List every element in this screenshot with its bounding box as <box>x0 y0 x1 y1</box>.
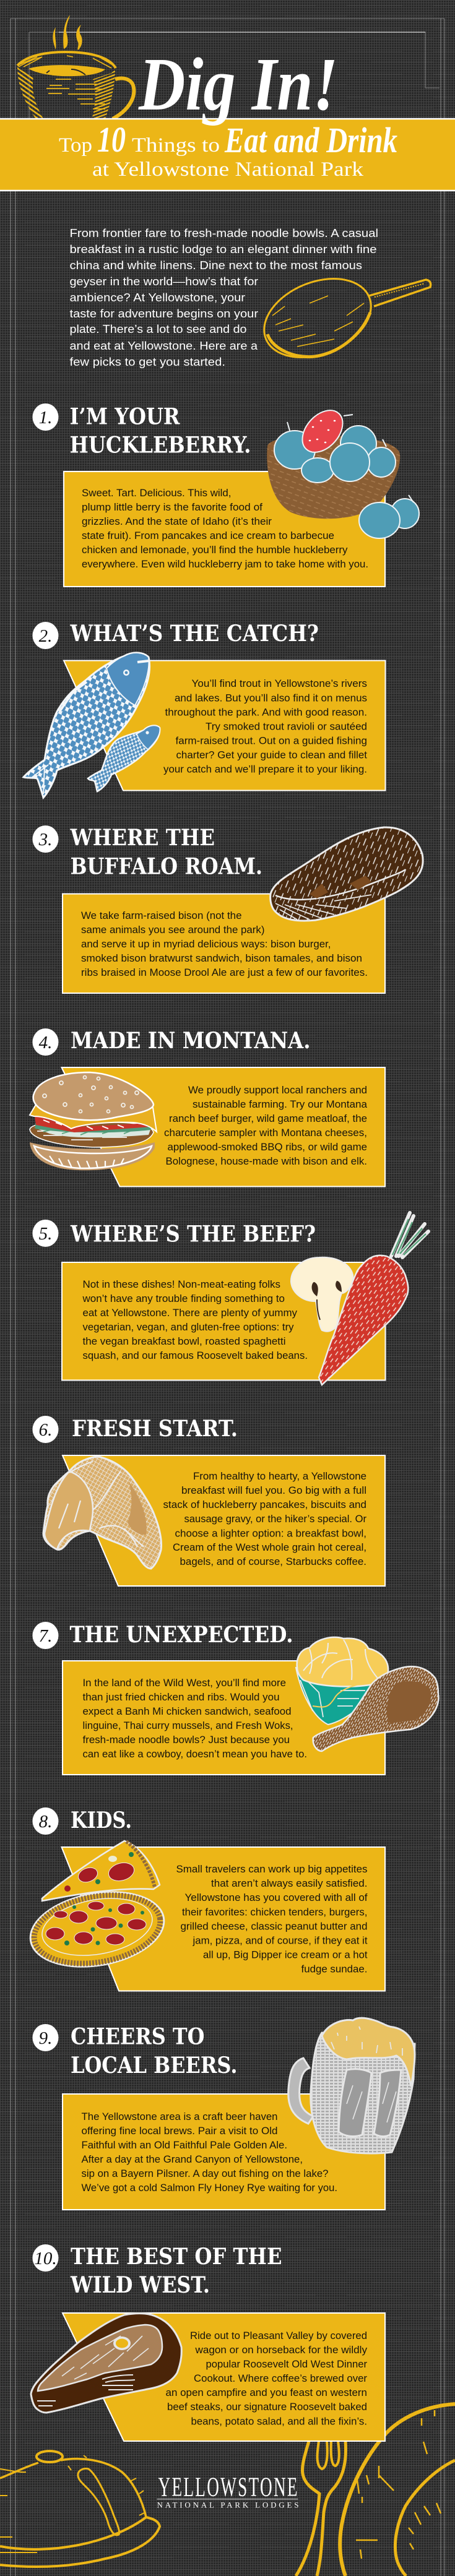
badge 6: 6. <box>39 1420 52 1440</box>
text panel: breakfast will fuel you. Go big with a full <box>181 1485 366 1496</box>
badge 10: 10. <box>34 2249 57 2268</box>
text panel: Try smoked trout ravioli or sautéed <box>206 722 367 733</box>
icon: beer mug <box>288 2018 415 2153</box>
text panel: bagels, and of course, Starbucks coffee. <box>180 1556 366 1567</box>
icon: croissant <box>43 1457 162 1569</box>
carrot leaves <box>391 1213 428 1257</box>
badge 2 <box>32 622 58 649</box>
text panel: all up, Big Dipper ice cream or a hot <box>203 1949 368 1960</box>
badge 1: 1. <box>39 408 52 428</box>
text panel: your catch and we’ll prepare it to your liking. <box>163 764 367 775</box>
icon: bison steak <box>271 827 423 921</box>
text panel <box>63 1661 385 1775</box>
heading: THE BEST OF THE <box>71 2244 282 2270</box>
heading <box>71 2023 238 2078</box>
heading: THE UNEXPECTED. <box>69 1622 293 1648</box>
text panel: popular Roosevelt Old West Dinner <box>206 2359 368 2370</box>
slice <box>42 1841 160 1901</box>
icon: chicken drumstick <box>313 1666 438 1751</box>
intro text: few picks to get you started. <box>69 355 225 368</box>
text panel: We’ve got a cold Salmon Fly Honey Rye waiting for you. <box>82 2182 337 2194</box>
tomato <box>35 1116 151 1132</box>
text panel: We take farm-raised bison (not the <box>81 910 241 921</box>
heading: I’M YOUR <box>69 403 180 429</box>
heading: HUCKLEBERRY. <box>69 432 251 458</box>
badge 3: 3. <box>38 830 52 850</box>
text panel: applewood-smoked BBQ ribs, or wild game <box>167 1142 367 1153</box>
section 5: where's the beef <box>32 1213 428 1385</box>
intro text <box>69 226 378 368</box>
logo: Yellowstone National Park Lodges: YELLOWSTONE <box>158 2471 298 2502</box>
text panel: throughout the park. And with good reason. <box>165 707 367 718</box>
intro text: geyser in the world—how’s that for <box>69 275 258 288</box>
intro text: china and white linens. Dine next to the most famous <box>69 259 362 272</box>
intro text: and eat at Yellowstone. Here are a <box>69 339 258 352</box>
bottom bun <box>30 1142 155 1170</box>
section 4: made in montana <box>30 1028 385 1187</box>
text panel: jam, pizza, and of course, if they eat it <box>192 1936 368 1947</box>
text panel: sustainable farming. Try our Montana <box>193 1099 368 1110</box>
icon: serving cloche <box>0 2451 160 2567</box>
text panel: You’ll find trout in Yellowstone’s rivers <box>192 678 367 689</box>
section 9: cheers to local beers <box>32 2018 415 2210</box>
badge 5: 5. <box>39 1224 52 1244</box>
large fish <box>24 653 150 798</box>
heading: CHEERS TO <box>71 2023 204 2049</box>
text panel: expect a Banh Mi chicken sandwich, seafood <box>83 1706 291 1717</box>
text panel: ranch beef burger, wild game meatloaf, the <box>169 1113 367 1124</box>
intro text: breakfast in a rustic lodge to an elegant dinner with fine <box>69 243 376 256</box>
text panel: Sweet. Tart. Delicious. This wild, <box>82 488 232 499</box>
text panel: In the land of the Wild West, you’ll find more <box>83 1678 286 1689</box>
text panel: From healthy to hearty, a Yellowstone <box>193 1471 366 1482</box>
badge 8 <box>32 1807 58 1835</box>
icon: basket of berries <box>267 403 419 538</box>
footer illustrations <box>0 2404 455 2576</box>
text panel: that aren’t always easily satisfied. <box>211 1878 368 1889</box>
text panel: can eat like a cowboy, doesn’t mean you have to. <box>83 1749 307 1760</box>
title: Dig In!: Dig In! <box>138 43 338 126</box>
text panel: same animals you see around the park) <box>81 924 265 936</box>
cheese <box>30 1103 157 1132</box>
subtitle <box>59 119 397 181</box>
intro text: ambience? At Yellowstone, your <box>69 291 245 304</box>
text panel: and lakes. But you’ll also find it on menus <box>175 693 367 704</box>
text panel: grilled cheese, classic peanut butter and <box>181 1921 368 1932</box>
text panel: smoked bison bratwurst sandwich, bison tamales, and bison <box>81 953 362 964</box>
heading: FRESH START. <box>72 1416 238 1442</box>
heading: BUFFALO ROAM. <box>71 854 262 880</box>
text panel <box>63 1455 385 1586</box>
text panel: Small travelers can work up big appetites <box>176 1864 368 1875</box>
section 1: huckleberry <box>32 403 419 587</box>
intro text: From frontier fare to fresh-made noodle bowls. A casual <box>69 226 378 239</box>
icon: pizza <box>25 1841 170 1976</box>
text panel: sip on a Bayern Pilsner. A day out fishing on the lake? <box>82 2168 328 2179</box>
text panel: charter? Get your guide to clean and fillet <box>176 750 367 761</box>
badge 9 <box>32 2024 58 2051</box>
badge 3 <box>32 825 58 853</box>
text panel: everywhere. Even wild huckleberry jam to take home with you. <box>82 559 368 570</box>
text panel: their favorites: chicken tenders, burgers, <box>182 1907 368 1918</box>
icon: frying pan <box>253 264 431 372</box>
text panel: eat at Yellowstone. There are plenty of yummy <box>83 1307 298 1319</box>
text panel <box>62 1847 385 1991</box>
subtitle: Eat and Drink <box>224 120 397 160</box>
text panel: After a day at the Grand Canyon of Yellowstone, <box>82 2154 303 2165</box>
badge 5 <box>32 1220 58 1247</box>
text panel <box>64 661 385 791</box>
icon: t-bone steak <box>31 2314 181 2413</box>
heading: LOCAL BEERS. <box>71 2053 238 2078</box>
badge 6 <box>32 1416 58 1443</box>
text panel: choose a lighter option: a breakfast bowl, <box>175 1528 366 1540</box>
text panel: beans, potato salad, and all the fixin’s. <box>191 2416 367 2427</box>
text panel <box>63 894 385 993</box>
text panel: fudge sundae. <box>301 1964 368 1975</box>
steam <box>53 15 82 50</box>
badge 10 <box>32 2244 58 2272</box>
text panel: The Yellowstone area is a craft beer haven <box>82 2111 277 2122</box>
intro text: plate. There’s a lot to see and do <box>69 322 246 335</box>
text panel: Faithful with an Old Faithful Pale Golden Ale. <box>82 2140 287 2151</box>
text panel: Yellowstone has you covered with all of <box>184 1892 368 1903</box>
heading: MADE IN MONTANA. <box>71 1028 311 1054</box>
badge 7 <box>32 1622 58 1649</box>
badge 4: 4. <box>39 1033 52 1053</box>
section 3: where the buffalo roam <box>32 825 423 993</box>
icon: mushroom <box>291 1257 353 1332</box>
icon: plate <box>340 2404 455 2576</box>
text panel: vegetarian, vegan, and gluten-free options: try <box>83 1322 294 1333</box>
text panel: an open campfire and you feast on western <box>166 2387 367 2398</box>
text panel: plump little berry is the favorite food of <box>82 502 262 513</box>
subtitle: Things to <box>132 134 220 157</box>
logo: Yellowstone National Park Lodges: NATIONAL PARK LODGES <box>157 2500 298 2510</box>
text panel <box>62 1067 385 1187</box>
text panel: state fruit). From pancakes and ice cream to barbecue <box>82 530 334 541</box>
text panel: Cream of the West whole grain hot cereal, <box>173 1542 366 1553</box>
text panel: grizzlies. And the state of Idaho (it’s their <box>82 516 272 527</box>
text panel <box>64 472 385 587</box>
text panel <box>63 2094 385 2210</box>
text panel: linguine, Thai curry mussels, and Fresh Woks, <box>83 1720 293 1731</box>
heading <box>69 403 251 458</box>
heading <box>70 825 262 880</box>
icon: burger <box>30 1072 157 1170</box>
lettuce <box>34 1126 152 1137</box>
section 10: best of the wild west <box>31 2244 385 2441</box>
badge 4 <box>32 1028 58 1056</box>
intro text: taste for adventure begins on your <box>69 307 258 320</box>
text panel: and serve it up in myriad delicious ways: bison burger, <box>81 939 331 950</box>
text panel: sausage gravy, or the hiker’s special. Or <box>184 1514 366 1525</box>
whole pizza <box>25 1882 170 1976</box>
icon: noodle bowl <box>296 1637 388 1725</box>
heading: KIDS. <box>71 1807 132 1833</box>
text panel: than just fried chicken and ribs. Would you <box>83 1692 280 1703</box>
section 6: fresh start <box>32 1416 385 1586</box>
text panel: We proudly support local ranchers and <box>188 1085 367 1096</box>
text panel <box>62 1262 385 1380</box>
heading: WHERE THE <box>70 825 215 851</box>
badge 2: 2. <box>39 626 52 646</box>
text panel: stack of huckleberry pancakes, biscuits and <box>163 1499 366 1510</box>
subtitle: at Yellowstone National Park <box>92 158 364 181</box>
banner <box>0 119 455 191</box>
badge 1 <box>32 403 58 431</box>
text panel: won’t have any trouble finding something to <box>82 1293 285 1304</box>
text panel: squash, and our famous Roosevelt baked beans. <box>83 1350 308 1361</box>
section 2: what's the catch <box>24 621 385 798</box>
heading <box>70 2244 282 2298</box>
text panel <box>63 2313 385 2441</box>
text panel: wagon or on horseback for the wildly <box>194 2345 368 2356</box>
icon: two trout <box>24 653 160 798</box>
icon: coffee cup <box>17 15 134 119</box>
text panel: charcuterie sampler with Montana cheeses, <box>164 1127 367 1139</box>
text panel: ribs braised in Moose Drool Ale are just a few of our favorites. <box>81 967 368 978</box>
badge 8: 8. <box>39 1812 52 1832</box>
heading: WHAT’S THE CATCH? <box>70 621 319 647</box>
heading: WILD WEST. <box>70 2272 210 2298</box>
text panel: beef steaks, our signature Roosevelt baked <box>167 2402 367 2413</box>
text panel: farm-raised trout. Out on a guided fishing <box>176 735 367 746</box>
patty <box>30 1122 154 1147</box>
text panel: offering fine local brews. Pair a visit to Old <box>82 2126 277 2137</box>
text panel: Not in these dishes! Non-meat-eating folks <box>83 1279 280 1290</box>
heading: WHERE’S THE BEEF? <box>70 1221 316 1247</box>
badge 9: 9. <box>39 2028 52 2048</box>
text panel: Bolognese, house-made with bison and elk. <box>166 1156 367 1167</box>
icon: fork <box>296 2441 345 2576</box>
small fish <box>88 726 160 791</box>
section 8: kids <box>25 1807 385 1991</box>
text panel: Cookout. Where coffee’s brewed over <box>194 2373 368 2384</box>
icon: carrot <box>319 1213 428 1385</box>
text panel: chicken and lemonade, you’ll find the humble huckleberry <box>82 545 348 556</box>
subtitle: 10 <box>97 119 126 160</box>
section 7: the unexpected <box>32 1622 438 1775</box>
text panel: fresh-made noodle bowls? Just because you <box>83 1734 290 1746</box>
text panel: the vegan breakfast bowl, roasted spaghetti <box>83 1336 286 1347</box>
subtitle: Top <box>59 134 92 157</box>
badge 7: 7. <box>39 1626 52 1646</box>
text panel: Ride out to Pleasant Valley by covered <box>190 2330 367 2341</box>
top bun <box>33 1072 154 1120</box>
